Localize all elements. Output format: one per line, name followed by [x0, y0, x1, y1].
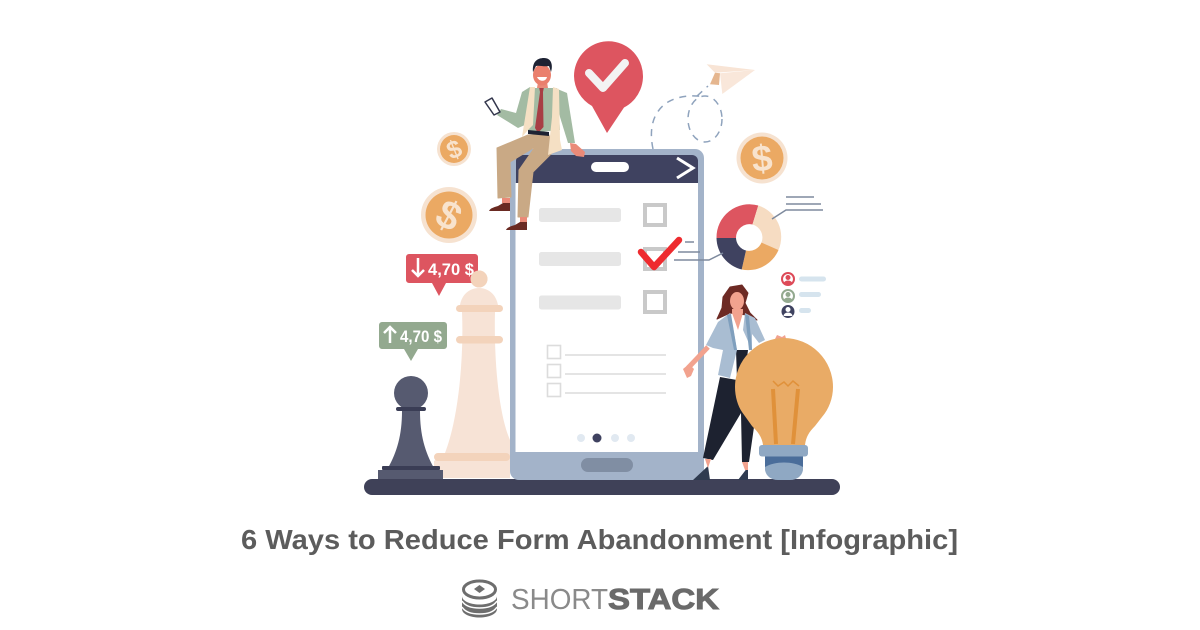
- green price tag: [379, 322, 447, 361]
- phone screen: [516, 183, 698, 452]
- man sitting on phone: [485, 58, 585, 230]
- small tilted coin: $: [443, 134, 466, 166]
- woman jacket: [706, 313, 765, 378]
- large tilted coin: [421, 187, 477, 243]
- logo: ShortStack: [462, 581, 719, 618]
- pagination dots: [577, 434, 635, 442]
- man shoes: [489, 198, 527, 230]
- woman hand: [683, 364, 694, 378]
- bulb filament: [773, 381, 799, 444]
- user list: [782, 273, 826, 318]
- donut callout lines: [674, 197, 823, 260]
- checklist: [548, 346, 666, 396]
- dashed flight path: [651, 86, 722, 149]
- woman standing: [683, 285, 765, 480]
- woman shoes: [693, 466, 748, 480]
- ground bar: [364, 479, 840, 495]
- header pill: [591, 162, 629, 172]
- green price tag: 4,70 $: [400, 327, 442, 346]
- woman face: [730, 292, 744, 310]
- woman arm: [688, 347, 708, 368]
- right coin: $: [750, 137, 775, 180]
- small tilted coin: [437, 132, 471, 166]
- phone header bar: [516, 155, 698, 183]
- woman shirt: [733, 327, 748, 350]
- woman trousers: [703, 350, 754, 462]
- large tilted coin: $: [428, 191, 469, 241]
- red price tag: [406, 254, 488, 296]
- bulb glass: [735, 338, 833, 445]
- red price tag: 4,70 $: [428, 260, 475, 279]
- man hand: [570, 143, 585, 157]
- location pin with check: [574, 41, 643, 133]
- man torso: [528, 88, 560, 133]
- home button: [581, 458, 633, 472]
- paper plane: [707, 64, 755, 94]
- phone body: [510, 149, 704, 480]
- man belt: [528, 130, 549, 136]
- man phone: [485, 98, 500, 115]
- fingers on bulb: [775, 335, 787, 342]
- pawn chess piece: [378, 376, 443, 479]
- woman hair: [717, 285, 757, 320]
- man neck and head: [533, 58, 552, 88]
- man vest: [522, 87, 562, 155]
- logo wordmark bold: STACK: [608, 584, 719, 616]
- man tie: [535, 87, 544, 133]
- donut chart: [716, 204, 781, 270]
- man left arm: [497, 87, 531, 128]
- light bulb: [735, 335, 833, 480]
- right coin: [736, 132, 788, 184]
- man right arm: [555, 88, 575, 143]
- logo wordmark: SHORT: [511, 584, 608, 616]
- bulb socket: [765, 456, 803, 467]
- queen chess piece: [434, 270, 510, 478]
- header chevron: [677, 158, 693, 178]
- form field rows: [539, 205, 665, 312]
- logo stack icon: [462, 581, 497, 618]
- red check mark: [641, 240, 679, 267]
- woman neck: [732, 309, 743, 330]
- man trousers: [497, 135, 553, 217]
- title: 6 Ways to Reduce Form Abandonment [Infographic]: [241, 524, 958, 555]
